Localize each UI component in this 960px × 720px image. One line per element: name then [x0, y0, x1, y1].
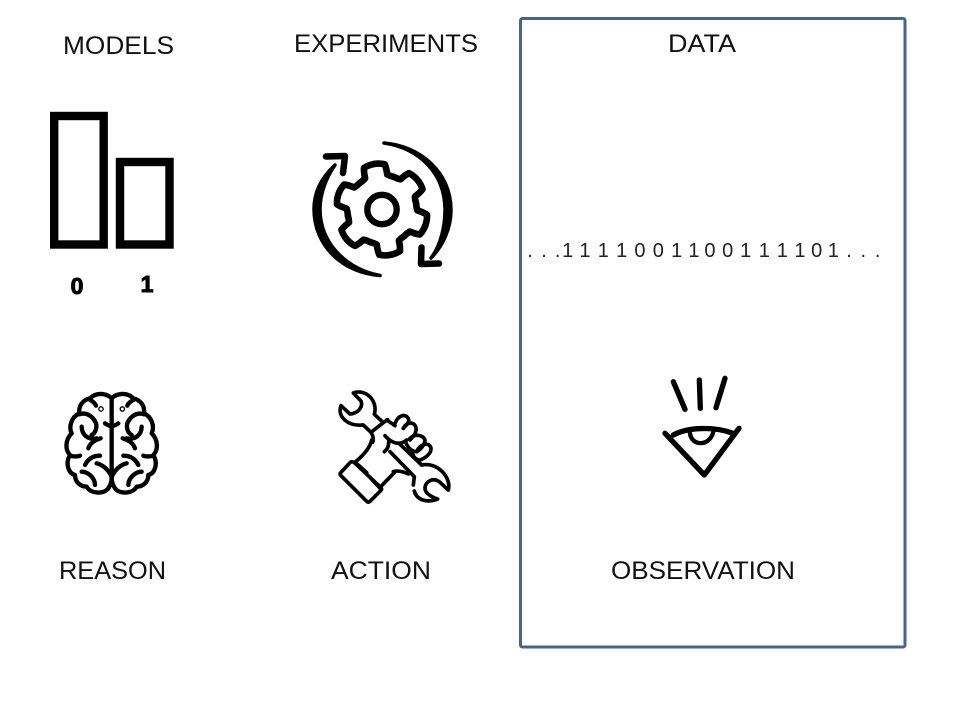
label: observation: OBSERVATION	[611, 557, 795, 585]
arrow: clockwise left	[314, 156, 380, 276]
brain right hemisphere	[112, 394, 157, 493]
pupil	[690, 432, 713, 443]
hand, fingers and lower wrench	[384, 416, 449, 501]
shirt cuff and wrist	[340, 440, 394, 502]
eye rays	[673, 378, 725, 409]
icon: brain	[66, 394, 157, 493]
bar chart: binary model	[54, 116, 170, 299]
gear outline	[333, 161, 431, 258]
heading: models: MODELS	[63, 32, 174, 60]
bar: outcome 0	[54, 116, 104, 244]
wrench upper head	[340, 392, 388, 442]
eye shape	[665, 428, 739, 475]
icon: rotating gear	[314, 143, 451, 276]
bar label: 0: 0	[71, 273, 83, 299]
bar: outcome 1	[120, 162, 170, 244]
label: action: ACTION	[331, 557, 431, 585]
arrow: clockwise right	[384, 143, 451, 264]
label: reason: REASON	[59, 557, 166, 585]
icon: hand holding wrench	[340, 392, 449, 502]
brain midline	[105, 398, 118, 477]
bar label: 1: 1	[141, 271, 154, 297]
icon: eye with rays	[665, 378, 739, 475]
heading: experiments: EXPERIMENTS	[294, 30, 478, 58]
heading: data: DATA	[668, 30, 736, 58]
brain left hemisphere	[66, 394, 112, 493]
panel: data and observation frame	[520, 18, 905, 647]
binary sequence: ...1111001100111101...	[527, 240, 880, 262]
